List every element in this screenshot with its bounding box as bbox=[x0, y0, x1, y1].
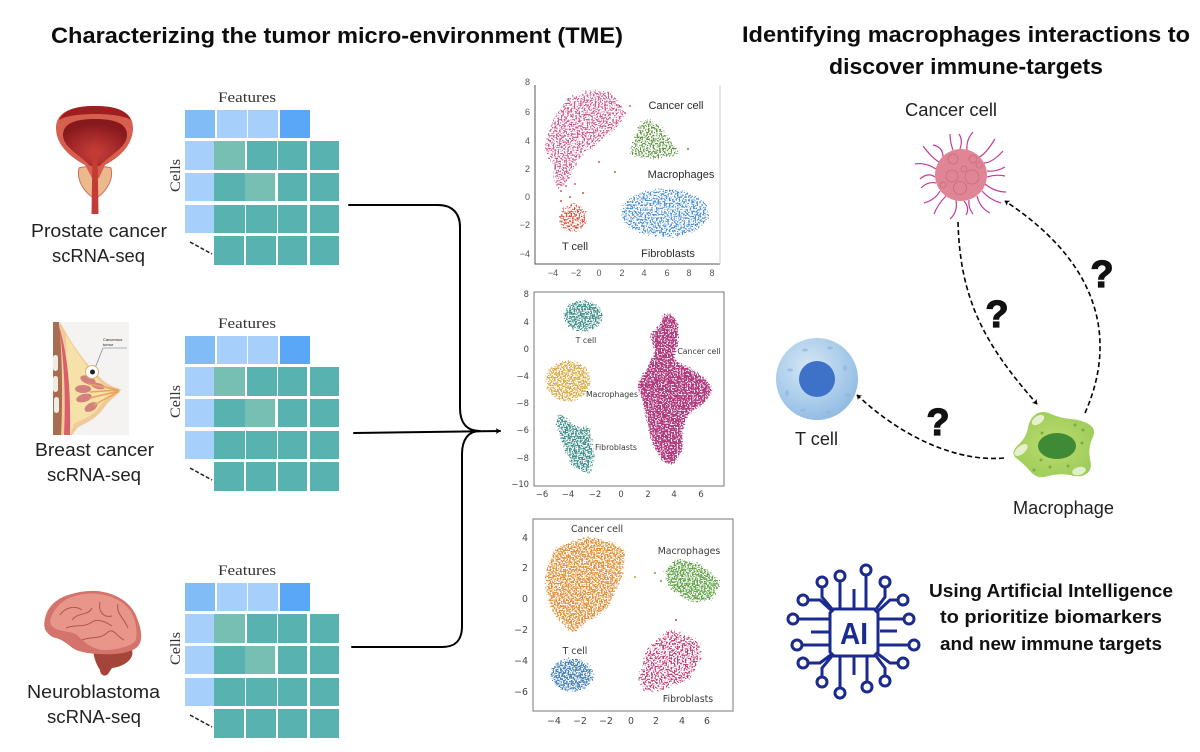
label: breast cancer: scRNA-seq bbox=[47, 465, 141, 485]
arrow: neuroblastoma data into merged flow bbox=[352, 431, 480, 647]
label: T cell: T cell bbox=[795, 429, 838, 449]
chart: prostate UMAP clusters bbox=[520, 77, 720, 278]
chart: breast UMAP clusters: Macrophages bbox=[586, 390, 638, 399]
matrix: breast features by cells: Cells bbox=[168, 385, 184, 418]
text: using artificial intelligence: Using Artificial Intelligence bbox=[929, 581, 1173, 601]
icon: breast anatomy: tumor bbox=[103, 342, 114, 347]
question mark: macrophage to cancer cell: ? bbox=[1090, 254, 1114, 296]
text: using artificial intelligence: and new immune targets bbox=[940, 634, 1162, 654]
chart: prostate UMAP clusters: −2 bbox=[571, 268, 581, 278]
chart: breast UMAP clusters: T cell bbox=[575, 336, 596, 345]
arrow: prostate data into merged flow bbox=[349, 205, 480, 431]
chart: prostate UMAP clusters: Cancer cell bbox=[648, 100, 704, 112]
matrix: prostate features by cells: Features bbox=[218, 90, 276, 106]
chart: prostate UMAP clusters: −2 bbox=[520, 220, 530, 230]
arrow: macrophage to T cell bbox=[857, 395, 1004, 458]
chart: neuroblastoma UMAP clusters: Macrophages bbox=[658, 546, 720, 557]
chart: breast UMAP clusters: 4 bbox=[524, 317, 529, 327]
arrow: cancer cell to macrophage bbox=[958, 222, 1037, 404]
label: cancer cell: Cancer cell bbox=[905, 100, 997, 120]
icon: cancer cell bbox=[915, 132, 1006, 219]
chart: prostate UMAP clusters: −4 bbox=[520, 249, 530, 259]
chart: breast UMAP clusters: 8 bbox=[524, 289, 529, 299]
label: neuroblastoma: scRNA-seq bbox=[47, 707, 141, 727]
chart: neuroblastoma UMAP clusters: 0 bbox=[628, 716, 634, 727]
chart: neuroblastoma UMAP clusters: Fibroblasts bbox=[663, 694, 713, 705]
chart: prostate UMAP clusters: 0 bbox=[525, 192, 530, 202]
icon: T cell bbox=[776, 338, 858, 420]
chart: prostate UMAP clusters: 2 bbox=[619, 268, 625, 278]
chart: neuroblastoma UMAP clusters bbox=[514, 519, 733, 727]
question mark: macrophage to T cell: ? bbox=[926, 402, 950, 444]
chart: neuroblastoma UMAP clusters: −2 bbox=[573, 716, 587, 727]
chart: neuroblastoma UMAP clusters: 0 bbox=[522, 594, 528, 605]
label: macrophage: Macrophage bbox=[1013, 498, 1114, 518]
label: neuroblastoma: Neuroblastoma bbox=[27, 682, 161, 702]
chart: breast UMAP clusters: 0 bbox=[618, 489, 624, 499]
chart: neuroblastoma UMAP clusters: −4 bbox=[514, 656, 528, 667]
icon: AI chip bbox=[788, 565, 919, 698]
chart: prostate UMAP clusters: 0 bbox=[596, 268, 602, 278]
title: identifying macrophage interactions: Identifying macrophages interactions to bbox=[742, 22, 1190, 47]
icon: macrophage bbox=[1012, 412, 1094, 477]
chart: prostate UMAP clusters: Macrophages bbox=[648, 169, 715, 181]
chart: neuroblastoma UMAP clusters: 2 bbox=[522, 563, 528, 574]
chart: breast UMAP clusters: −4 bbox=[562, 489, 574, 499]
chart: breast UMAP clusters: −6 bbox=[536, 489, 548, 499]
label: prostate cancer: scRNA-seq bbox=[52, 246, 145, 266]
title: characterizing the TME: Characterizing the tumor micro-environment (TME) bbox=[51, 23, 623, 48]
chart: prostate UMAP clusters: 8 bbox=[686, 268, 692, 278]
chart: prostate UMAP clusters: 2 bbox=[525, 164, 530, 174]
chart: breast UMAP clusters: Fibroblasts bbox=[595, 443, 637, 452]
arrow: breast data to clusters bbox=[354, 431, 500, 433]
chart: prostate UMAP clusters: 6 bbox=[525, 107, 530, 117]
chart: neuroblastoma UMAP clusters: −6 bbox=[514, 687, 528, 698]
chart: prostate UMAP clusters: 4 bbox=[525, 136, 530, 146]
chart: neuroblastoma UMAP clusters: 4 bbox=[679, 716, 685, 727]
chart: prostate UMAP clusters: −4 bbox=[548, 268, 558, 278]
chart: breast UMAP clusters: −6 bbox=[517, 425, 529, 435]
matrix: neuroblastoma features by cells: Cells bbox=[168, 632, 184, 665]
chart: breast UMAP clusters: −2 bbox=[589, 489, 601, 499]
chart: neuroblastoma UMAP clusters: Cancer cell bbox=[571, 524, 623, 535]
icon: breast anatomy bbox=[53, 322, 129, 435]
chart: prostate UMAP clusters: 8 bbox=[525, 77, 530, 87]
matrix: prostate features by cells bbox=[168, 90, 339, 265]
chart: breast UMAP clusters: 0 bbox=[524, 344, 529, 354]
chart: neuroblastoma UMAP clusters: −2 bbox=[514, 625, 528, 636]
icon: breast anatomy: Cancerous bbox=[103, 337, 122, 342]
chart: prostate UMAP clusters: T cell bbox=[562, 241, 588, 253]
chart: neuroblastoma UMAP clusters: T cell bbox=[562, 646, 587, 657]
chart: prostate UMAP clusters: 4 bbox=[641, 268, 647, 278]
icon: AI chip: AI bbox=[840, 616, 868, 651]
icon: prostate bbox=[56, 106, 133, 214]
chart: prostate UMAP clusters: 8 bbox=[709, 268, 715, 278]
chart: breast UMAP clusters: Cancer cell bbox=[677, 347, 721, 356]
chart: breast UMAP clusters: −4 bbox=[517, 371, 529, 381]
chart: breast UMAP clusters: −10 bbox=[511, 479, 529, 489]
label: breast cancer: Breast cancer bbox=[35, 440, 154, 460]
chart: breast UMAP clusters: 4 bbox=[671, 489, 677, 499]
chart: neuroblastoma UMAP clusters: 2 bbox=[653, 716, 659, 727]
question mark: cancer cell to macrophage: ? bbox=[985, 294, 1009, 336]
chart: neuroblastoma UMAP clusters: 6 bbox=[704, 716, 710, 727]
chart: breast UMAP clusters: −8 bbox=[517, 453, 529, 463]
chart: prostate UMAP clusters: 6 bbox=[664, 268, 670, 278]
chart: neuroblastoma UMAP clusters: −4 bbox=[547, 716, 561, 727]
chart: neuroblastoma UMAP clusters: −2 bbox=[599, 716, 613, 727]
chart: prostate UMAP clusters: Fibroblasts bbox=[641, 248, 695, 260]
matrix: breast features by cells bbox=[168, 316, 339, 491]
text: using artificial intelligence: to prioritize biomarkers bbox=[940, 607, 1162, 627]
matrix: neuroblastoma features by cells bbox=[168, 563, 339, 738]
chart: breast UMAP clusters: −8 bbox=[517, 398, 529, 408]
chart: breast UMAP clusters bbox=[511, 289, 724, 499]
matrix: prostate features by cells: Cells bbox=[168, 159, 184, 192]
matrix: neuroblastoma features by cells: Features bbox=[218, 563, 276, 579]
chart: breast UMAP clusters: 6 bbox=[698, 489, 704, 499]
chart: neuroblastoma UMAP clusters: 4 bbox=[522, 533, 528, 544]
arrow: macrophage to cancer cell bbox=[1005, 201, 1100, 413]
matrix: breast features by cells: Features bbox=[218, 316, 276, 332]
label: prostate cancer: Prostate cancer bbox=[31, 221, 167, 241]
chart: breast UMAP clusters: 2 bbox=[645, 489, 651, 499]
icon: brain bbox=[44, 591, 141, 676]
title: identifying macrophage interactions: discover immune-targets bbox=[829, 54, 1103, 79]
